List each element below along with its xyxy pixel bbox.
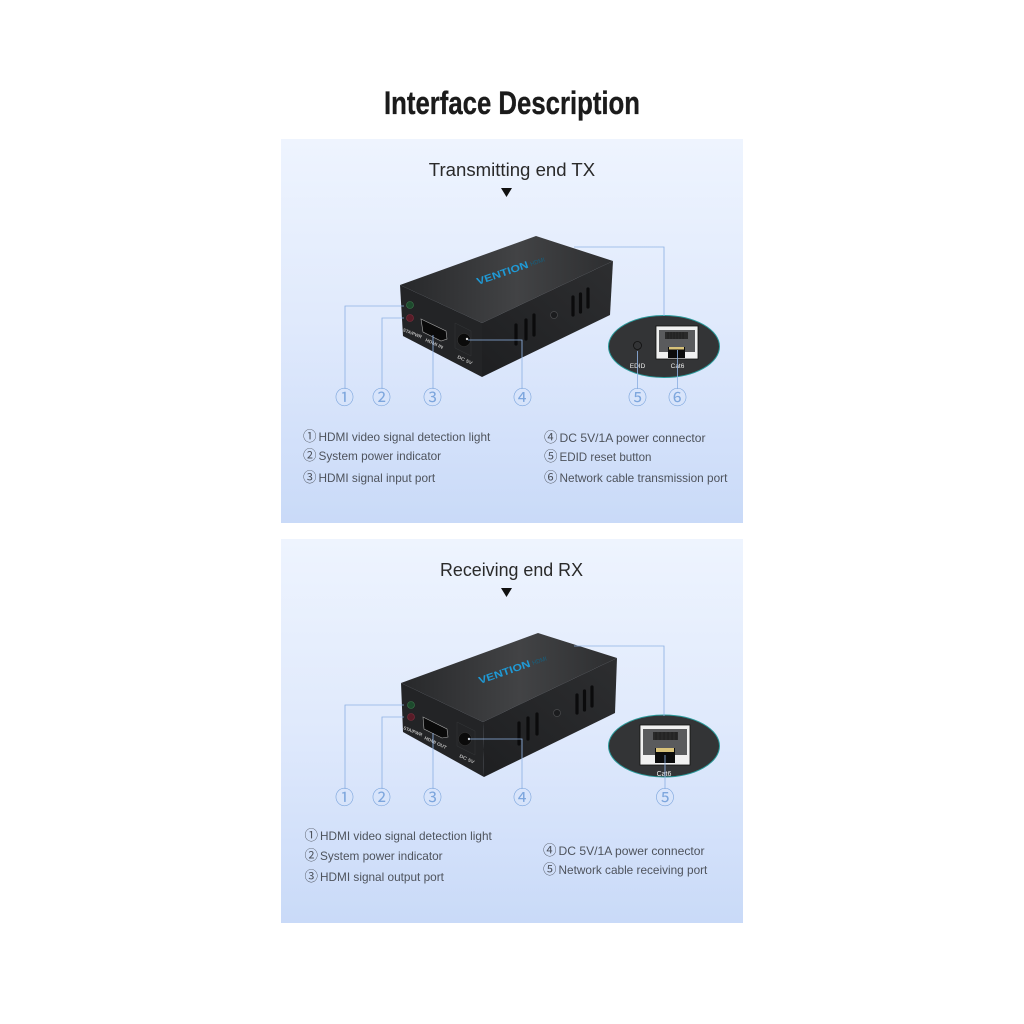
device: TX box [400,236,613,377]
device: RX box: HDMI OUT [424,735,448,750]
leader lines TX [345,247,678,389]
callout numbers TX [335,383,687,410]
panel: receiving end RX [281,539,743,923]
heading: RX: Receiving end RX [440,559,584,580]
callout numbers RX: ④ [513,783,532,810]
legend TX left: System power indicator [318,449,441,463]
callout numbers TX: ② [372,383,391,410]
legend RX left: ③ [304,869,318,884]
device: RX box: VENTION [477,659,532,687]
legend TX right: ⑥ [544,470,558,485]
legend TX right: ④ [544,430,558,445]
callout numbers TX: ⑤ [628,383,647,410]
legend TX left: ② [303,448,317,463]
device: TX box: DC 5V [457,354,474,366]
legend RX left [304,828,493,884]
legend TX right: DC 5V/1A power connector [560,431,706,445]
callout: TX rear ports: EDID [630,363,646,370]
legend RX right [543,843,708,877]
legend RX right: DC 5V/1A power connector [558,844,705,858]
callout: RX rear port [608,715,720,778]
legend TX right: EDID reset button [560,450,652,464]
callout numbers RX [335,783,675,810]
legend TX right: ⑤ [544,449,558,464]
legend TX right: Network cable transmission port [560,471,728,485]
callout numbers RX: ③ [423,783,442,810]
legend RX left: System power indicator [320,849,443,863]
callout numbers TX: ① [335,383,354,410]
device: TX box: VENTION [475,260,530,288]
callout numbers RX: ① [335,783,354,810]
device: RX box: HDMI [532,656,548,667]
callout numbers TX: ⑥ [668,383,687,410]
legend TX left [303,429,491,485]
callout numbers RX: ⑤ [655,783,675,810]
device: TX box: HDMI IN [425,337,445,350]
legend RX right: ④ [543,843,557,858]
legend RX right: ⑤ [543,862,557,877]
callout numbers RX: ② [372,783,391,810]
callout: TX rear ports [608,316,720,378]
callout numbers TX: ③ [423,383,442,410]
leader lines RX [345,646,665,789]
legend TX left: HDMI video signal detection light [318,430,491,444]
device: TX box: HDMI [530,257,546,268]
device: RX box: STA/PWR [403,725,424,738]
callout numbers TX: ④ [513,383,532,410]
legend RX left: HDMI video signal detection light [320,829,493,843]
callout: RX rear port: Cat6 [657,771,671,778]
icon: down triangle TX [501,188,512,197]
legend TX right [544,430,728,485]
legend RX left: ① [304,828,318,843]
device: TX box: STA/PWR [402,327,423,340]
callout: TX rear ports: Cat6 [671,363,685,370]
icon: down triangle RX [501,588,512,597]
legend TX left: HDMI signal input port [318,471,436,485]
legend RX left: HDMI signal output port [320,870,445,884]
device: RX box [401,633,617,777]
device: RX box: DC 5V [459,753,476,765]
legend RX left: ② [304,848,318,863]
legend TX left: ③ [303,470,317,485]
panel: transmitting end TX [281,139,743,523]
heading: TX: Transmitting end TX [429,159,596,180]
title: Interface Description [384,85,640,121]
legend TX left: ① [303,429,317,444]
legend RX right: Network cable receiving port [558,863,708,877]
